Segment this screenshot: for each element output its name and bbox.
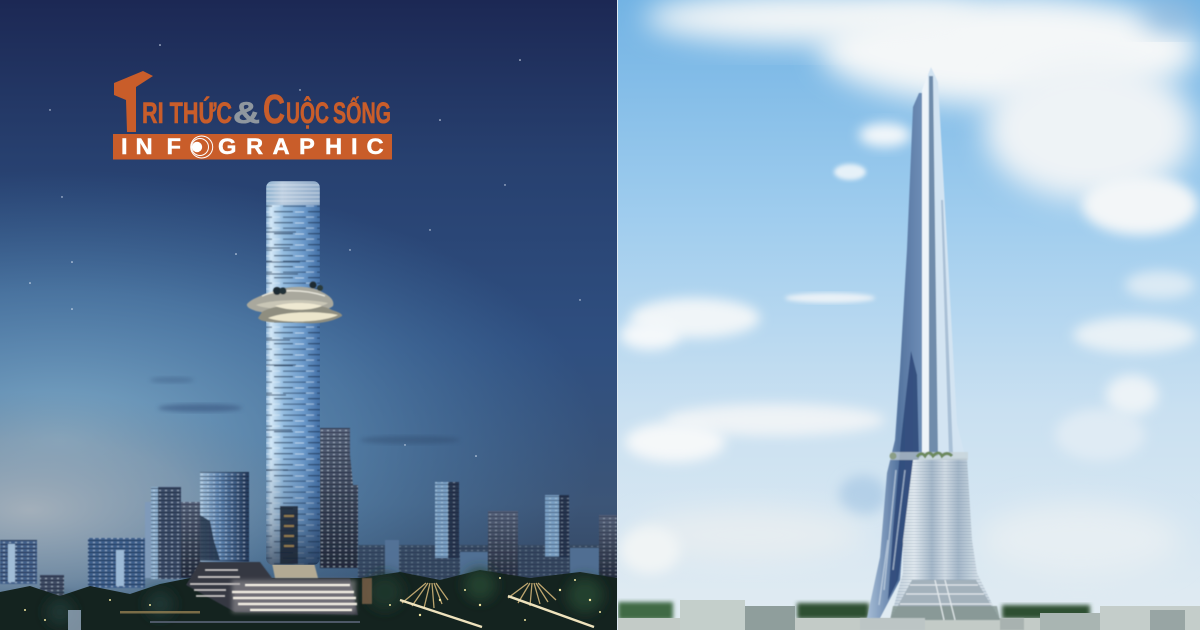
spire dark left face [867, 93, 924, 618]
day sky and clouds [618, 0, 1200, 630]
night sky background [0, 0, 617, 630]
logo wordmark: & [233, 95, 260, 130]
panel: daytime view of The Empire spire [618, 0, 1200, 630]
logo wordmark: UỘC [286, 96, 329, 130]
spire right pale face [928, 68, 956, 453]
distant trees and low buildings [618, 600, 1200, 630]
right side towers [435, 482, 617, 583]
logo wordmark [143, 94, 390, 129]
logo: Tri Thức & Cuộc Sống Infographic [113, 71, 392, 160]
spire plinth [860, 618, 1024, 630]
logo wordmark: RI THỨC [142, 96, 232, 130]
left side buildings [0, 487, 201, 599]
logo banner [113, 134, 392, 160]
spire garden ledge [890, 452, 968, 460]
Empire 88 tower shaft [266, 181, 320, 565]
spire thin right stripe [941, 200, 953, 456]
logo banner: GRAPHIC [218, 134, 384, 159]
spire glass base [898, 580, 992, 618]
logo banner: INF [121, 134, 181, 159]
ground, trees and lit roads [0, 569, 617, 630]
panel: night skyline with Empire 88 tower [0, 0, 617, 630]
logo wordmark: C [263, 86, 285, 132]
spire inner dark arch [888, 351, 919, 600]
glass building beside the tower [200, 472, 249, 562]
sky garden disc [247, 282, 342, 323]
building behind the tower [320, 428, 358, 568]
logo T mark [114, 71, 153, 132]
logo wordmark: SỐNG [333, 96, 391, 130]
stepped podium [186, 562, 372, 615]
distant city band [358, 540, 617, 580]
spire centre dark stripe [929, 76, 938, 456]
spire lower skirt [894, 458, 993, 606]
spire white strip [922, 74, 929, 456]
icon: target O [191, 136, 213, 158]
The Empire spire [860, 67, 1024, 630]
